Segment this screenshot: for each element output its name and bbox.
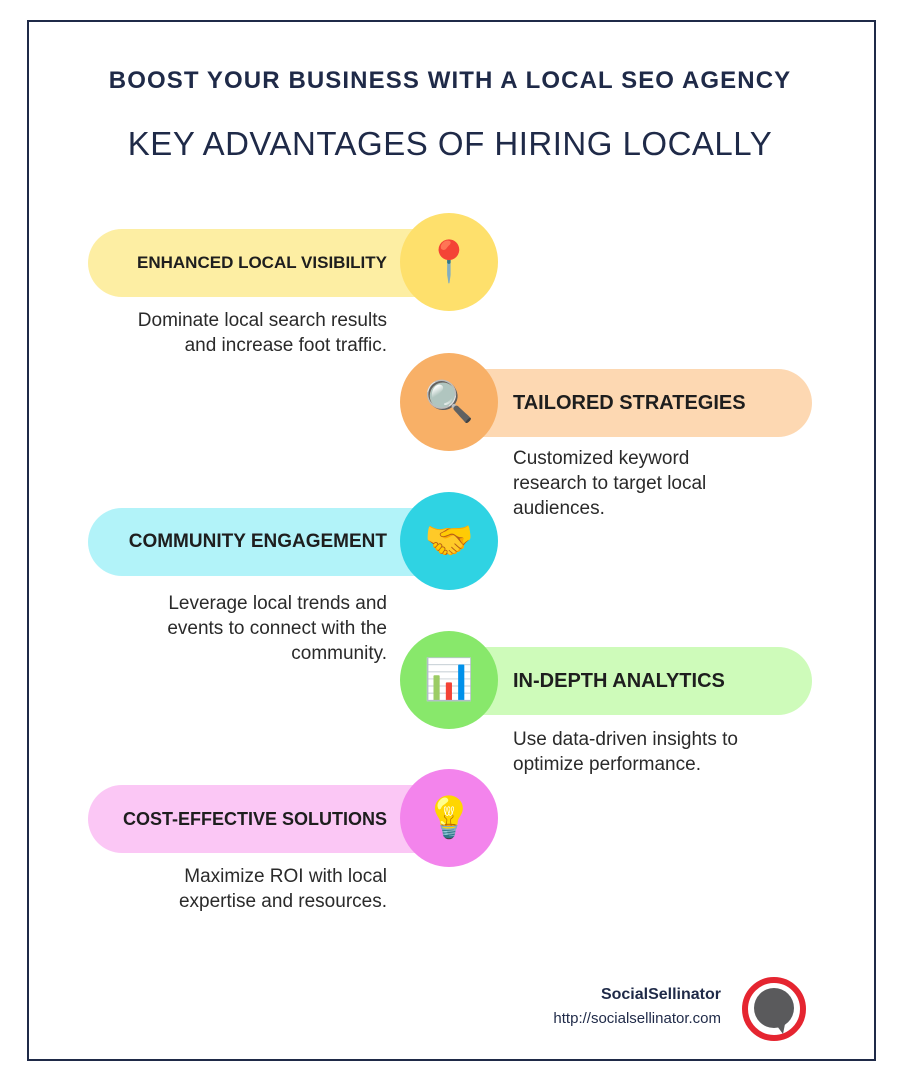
description: events to connect with the	[167, 618, 387, 639]
item: enhanced local visibility	[88, 213, 498, 356]
icon: magnifier	[400, 353, 498, 451]
label: COST-EFFECTIVE SOLUTIONS	[123, 809, 387, 829]
description	[179, 866, 387, 912]
description: Customized keyword	[513, 448, 689, 469]
item: tailored strategies	[400, 353, 812, 519]
icon: chart: 📊	[424, 658, 474, 702]
description: Use data-driven insights to	[513, 729, 738, 750]
title: BOOST YOUR BUSINESS WITH A LOCAL SEO AGENCY	[109, 67, 791, 94]
icon: pin	[400, 213, 498, 311]
description: audiences.	[513, 498, 605, 519]
icon: chart	[400, 631, 498, 729]
label: TAILORED STRATEGIES	[513, 392, 746, 414]
description: Maximize ROI with local	[184, 866, 387, 887]
description: optimize performance.	[513, 754, 701, 775]
description	[138, 310, 387, 356]
description: and increase foot traffic.	[185, 335, 387, 356]
item: in-depth analytics	[400, 631, 812, 775]
icon: bulb: 💡	[424, 796, 474, 840]
icon: handshake	[400, 492, 498, 590]
description: expertise and resources.	[179, 891, 387, 912]
item: community engagement	[88, 492, 498, 664]
label: ENHANCED LOCAL VISIBILITY	[137, 253, 387, 272]
description	[513, 729, 738, 775]
description	[167, 593, 387, 664]
icon: handshake: 🤝	[424, 519, 474, 563]
footer brand	[553, 986, 721, 1027]
footer brand: http://socialsellinator.com	[553, 1010, 721, 1027]
description: community.	[291, 643, 387, 664]
label: COMMUNITY ENGAGEMENT	[129, 531, 387, 552]
description: Leverage local trends and	[168, 593, 387, 614]
subtitle: KEY ADVANTAGES OF HIRING LOCALLY	[128, 125, 772, 162]
label: IN-DEPTH ANALYTICS	[513, 670, 725, 692]
icon: magnifier: 🔍	[424, 380, 474, 424]
description: research to target local	[513, 473, 706, 494]
icon: logo	[742, 977, 806, 1041]
description: Dominate local search results	[138, 310, 387, 331]
description	[513, 448, 706, 519]
footer brand: SocialSellinator	[601, 986, 721, 1003]
item: cost-effective solutions	[88, 769, 498, 912]
icon: pin: 📍	[424, 240, 474, 284]
icon: bulb	[400, 769, 498, 867]
